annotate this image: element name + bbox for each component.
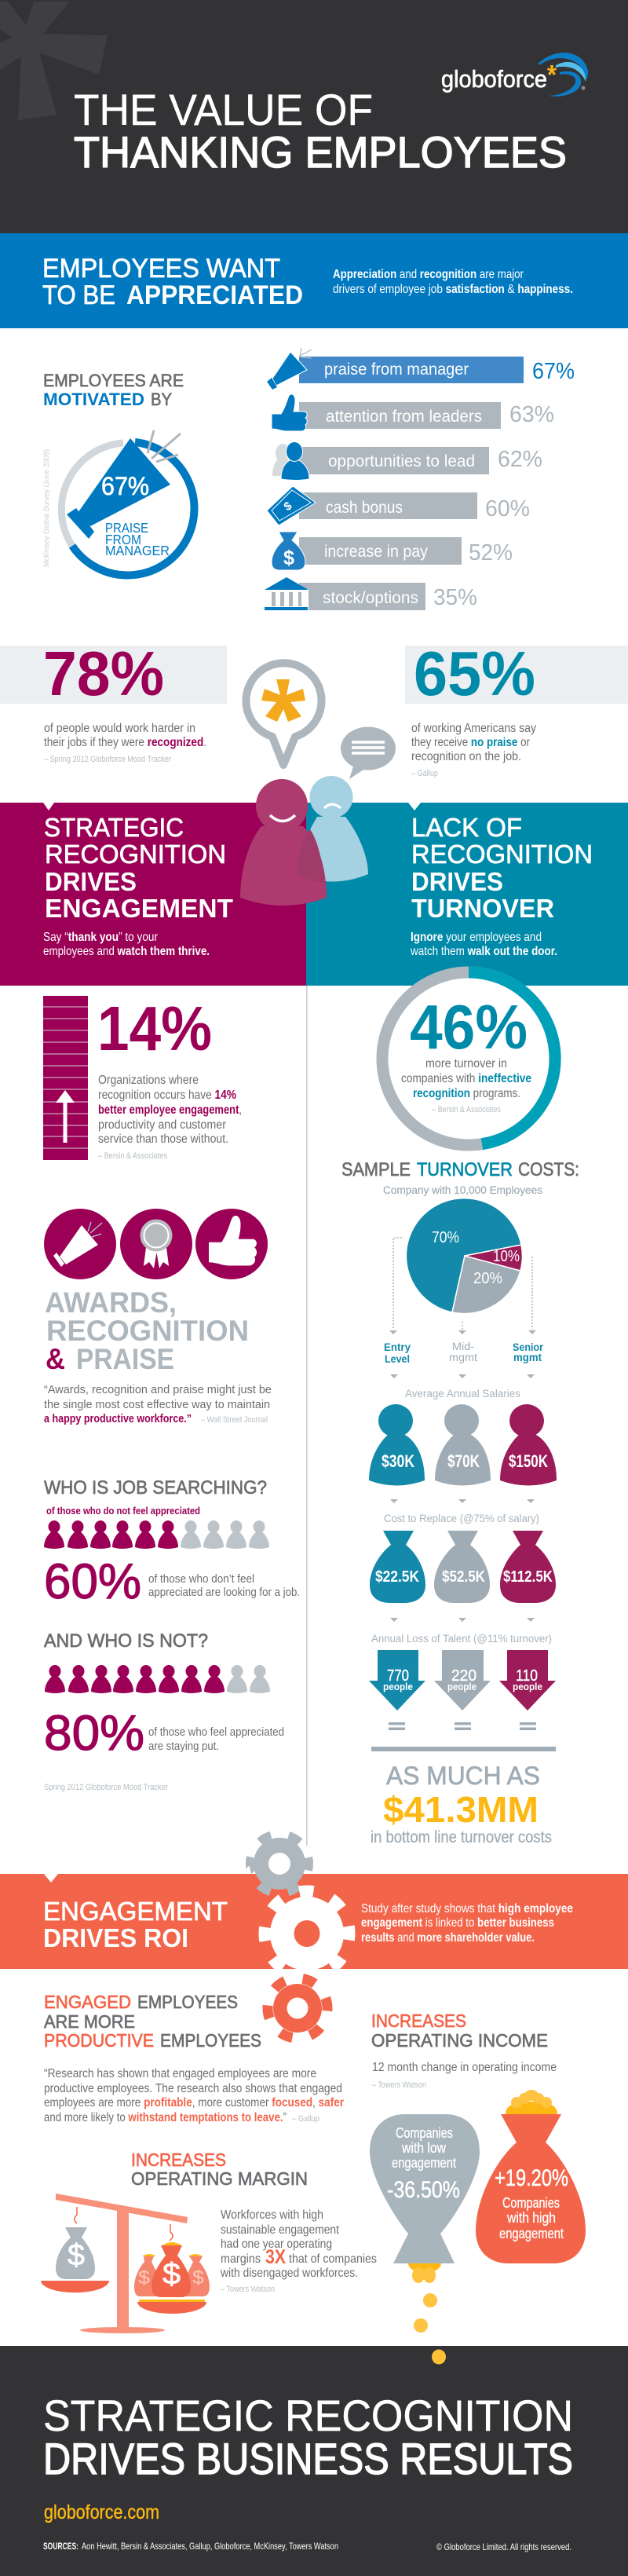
logo: globoforce: globoforce xyxy=(441,65,547,93)
arrow: 770 people: people xyxy=(383,1681,413,1692)
right bags: $ xyxy=(192,2267,204,2289)
subheading: of those who do not feel appreciated xyxy=(46,1505,200,1517)
description: 12 month change in operating income xyxy=(372,2061,557,2074)
panel: increases operating margin xyxy=(41,2150,377,2333)
source: McKinsey Global Survey (June 2009) xyxy=(42,449,50,567)
panel: 65% stat: 65% xyxy=(414,639,535,708)
title: THE VALUE OF xyxy=(74,85,373,134)
center divider xyxy=(306,986,308,1846)
bar: opportunities to lead: 62% xyxy=(498,447,542,472)
subtitle: Company with 10,000 Employees xyxy=(383,1184,542,1196)
icon: happy person xyxy=(240,779,327,906)
panel: 46% more turnover: 46% xyxy=(410,992,528,1062)
arrows: annual loss xyxy=(369,1650,556,1711)
source: – Towers Watson xyxy=(372,2080,426,2090)
panel: sample turnover costs xyxy=(341,1159,579,1846)
heading: RECOGNITION xyxy=(45,840,226,869)
panel: awards recognition and praise xyxy=(44,1209,272,1425)
title xyxy=(74,85,567,177)
icon: megaphone badge xyxy=(44,1209,116,1279)
description xyxy=(410,931,557,958)
description: – Spring 2012 Globoforce Mood Tracker xyxy=(44,755,171,764)
bar: attention from leaders xyxy=(299,402,554,429)
pie chart: 10% xyxy=(493,1248,520,1265)
person: senior management: $150K xyxy=(509,1451,548,1471)
description: watch them walk out the door. xyxy=(410,945,557,958)
description: employees and watch them thrive. xyxy=(43,945,210,958)
heading: EMPLOYEES xyxy=(160,2030,261,2051)
header panel xyxy=(0,0,628,233)
arrow: 110 people: 110 xyxy=(516,1667,538,1685)
bag: low engagement: Companies xyxy=(396,2125,453,2141)
description xyxy=(148,1572,300,1599)
description: of those who don’t feel xyxy=(148,1572,254,1586)
left bag: $ xyxy=(68,2239,85,2272)
heading: EMPLOYEES WANT xyxy=(42,254,280,284)
heading: EMPLOYEES ARE xyxy=(43,371,184,390)
icon: thumbs up xyxy=(272,394,307,431)
heading xyxy=(411,813,593,923)
bar chart xyxy=(265,348,575,611)
description: results and more shareholder value. xyxy=(361,1931,535,1945)
bar: stock/options: 35% xyxy=(433,585,477,610)
quote xyxy=(44,1383,272,1425)
bar: increase in pay: increase in pay xyxy=(324,543,428,561)
heading: OPERATING MARGIN xyxy=(131,2168,308,2189)
pie chart xyxy=(406,1198,522,1314)
arrowheads row 2 xyxy=(390,1374,535,1378)
bag: high engagement: engagement xyxy=(499,2226,564,2241)
bag: high engagement: +19.20% xyxy=(495,2165,568,2191)
bag: low engagement: with low xyxy=(401,2140,447,2156)
heading: COSTS: xyxy=(518,1159,579,1180)
panel: 65% stat xyxy=(405,639,628,778)
description: Say “thank you” to your xyxy=(43,931,159,944)
heading: AND WHO IS NOT? xyxy=(44,1630,208,1652)
heading xyxy=(44,1992,261,2051)
description: recognition occurs have 14% xyxy=(98,1089,236,1102)
heading: OPERATING INCOME xyxy=(371,2030,548,2051)
bar: praise from manager xyxy=(299,357,575,384)
description: sustainable engagement xyxy=(221,2223,339,2237)
description: Workforces with high xyxy=(221,2208,323,2222)
description: – Towers Watson xyxy=(221,2285,275,2294)
description: Appreciation and recognition are major xyxy=(333,268,524,281)
heading xyxy=(371,2011,548,2051)
description: with disengaged workforces. xyxy=(220,2267,358,2280)
logo: globoforce xyxy=(441,53,588,97)
bar: praise from manager: praise from manager xyxy=(324,360,469,379)
heading: TURNOVER xyxy=(417,1159,513,1180)
heading: TURNOVER xyxy=(411,894,554,923)
description: productivity and customer xyxy=(98,1118,226,1132)
heading: RECOGNITION xyxy=(411,840,593,869)
heading: WHO IS JOB SEARCHING? xyxy=(44,1477,267,1498)
description xyxy=(401,1057,531,1114)
stat: 60%: 60% xyxy=(44,1554,141,1609)
closing heading xyxy=(43,2391,573,2483)
description: – Bersin & Associates xyxy=(98,1151,167,1161)
quote: and more likely to withstand temptations to leave.” xyxy=(44,2111,287,2124)
description xyxy=(148,1725,284,1753)
heading: & xyxy=(46,1343,65,1375)
heading: MOTIVATED xyxy=(43,390,144,409)
total bar xyxy=(371,1747,556,1751)
callout: total cost: $41.3MM xyxy=(383,1789,539,1830)
description xyxy=(333,268,573,296)
pictogram: 8 of 10 xyxy=(45,1665,270,1693)
heading: INCREASES xyxy=(131,2150,226,2170)
arrowheads row 3 xyxy=(390,1499,535,1503)
level labels: Senior xyxy=(513,1341,543,1353)
bag: low engagement: engagement xyxy=(392,2155,456,2171)
heading: TO BE xyxy=(42,280,115,310)
icon: money bag xyxy=(272,532,305,570)
arrowheads row 4 xyxy=(390,1618,535,1622)
ring chart 67%: FROM xyxy=(105,532,141,547)
heading xyxy=(44,813,233,923)
panel: who is job searching xyxy=(44,1477,300,1609)
heading: SAMPLE xyxy=(341,1159,411,1180)
heading: ARE MORE xyxy=(44,2011,135,2032)
heading xyxy=(341,1159,579,1180)
description: of working Americans say xyxy=(411,722,536,735)
bar: cash bonus: 60% xyxy=(485,496,530,521)
heading xyxy=(43,371,184,409)
heading: ENGAGED xyxy=(44,1992,131,2012)
bag: entry level xyxy=(370,1531,425,1603)
heading: STRATEGIC xyxy=(44,813,184,842)
icon: message bubble xyxy=(341,727,396,779)
level labels: Level xyxy=(385,1352,410,1365)
quote xyxy=(44,2067,344,2124)
icon: megaphone xyxy=(267,348,312,390)
center figures: speech bubbles and people xyxy=(240,663,396,906)
description: more turnover in xyxy=(425,1057,507,1070)
ring chart 67%: PRAISE xyxy=(105,520,148,536)
description xyxy=(44,722,206,764)
description xyxy=(411,722,536,778)
bar: attention from leaders: 63% xyxy=(509,402,554,427)
callout: total cost xyxy=(371,1762,552,1846)
description: engagement is linked to better business xyxy=(361,1916,554,1930)
arrow: 770 people: 770 xyxy=(387,1667,409,1685)
dotted connectors xyxy=(393,1238,532,1330)
label: average annual salaries: Average Annual Salaries xyxy=(405,1388,520,1400)
bar: opportunities to lead xyxy=(299,447,542,474)
person: senior management xyxy=(500,1404,557,1486)
quote: productive employees. The research also shows that engaged xyxy=(44,2082,342,2095)
callout: total cost: in bottom line turnover costs xyxy=(371,1828,552,1846)
heading: PRODUCTIVE xyxy=(44,2030,154,2051)
icon: bank xyxy=(265,577,309,611)
description: drivers of employee job satisfaction & happiness. xyxy=(333,283,573,296)
description: they receive no praise or xyxy=(411,736,530,749)
icon: grey gear xyxy=(244,1828,315,1899)
heading xyxy=(42,254,303,310)
ring chart 67% xyxy=(61,430,194,575)
title: THANKING EMPLOYEES xyxy=(74,127,567,177)
description: companies with ineffective xyxy=(401,1072,531,1085)
pictogram: 6 of 10 xyxy=(44,1520,269,1549)
description: better employee engagement, xyxy=(98,1103,242,1117)
panel: lack of recognition drives turnover xyxy=(306,803,628,986)
bag: senior management: $112.5K xyxy=(503,1568,553,1586)
person: mid management: $70K xyxy=(447,1451,480,1471)
panel: strategic recognition drives engagement xyxy=(0,803,306,986)
icon: ribbon badge xyxy=(120,1209,192,1279)
bar: cash bonus xyxy=(299,492,530,521)
description: recognition on the job. xyxy=(411,750,521,763)
panel: 14% better engagement xyxy=(43,993,242,1161)
arrowheads row 1 xyxy=(389,1330,536,1334)
description: that of companies xyxy=(289,2252,377,2266)
arrow: 110 people xyxy=(499,1650,556,1711)
description: Organizations where xyxy=(98,1074,199,1087)
description: of people would work harder in xyxy=(44,722,195,735)
ring chart 67%: 67% xyxy=(101,472,149,500)
level labels: mgmt xyxy=(513,1351,542,1363)
description: 3X xyxy=(265,2246,286,2268)
heading: DRIVES xyxy=(45,867,137,896)
description: recognition programs. xyxy=(413,1087,520,1100)
decorative asterisk xyxy=(0,2,108,120)
panel: who is not searching xyxy=(44,1630,284,1792)
description: – Bersin & Associates xyxy=(432,1105,501,1114)
label: cost to replace: Cost to Replace (@75% of salary) xyxy=(384,1513,539,1524)
heading: INCREASES xyxy=(371,2011,466,2031)
source: Spring 2012 Globoforce Mood Tracker xyxy=(44,1783,168,1792)
description: – Gallup xyxy=(411,769,438,778)
heading: AWARDS, xyxy=(45,1286,177,1319)
arrow: 110 people: people xyxy=(513,1681,542,1692)
bar: increase in pay xyxy=(299,537,513,565)
bag: entry level: $22.5K xyxy=(375,1568,419,1586)
panel: 78% stat xyxy=(0,639,227,764)
description: service than those without. xyxy=(98,1132,228,1146)
arrow: 770 people xyxy=(369,1650,425,1711)
sources: SOURCES: xyxy=(43,2541,78,2552)
quote: employees are more profitable, more customer focused, safer xyxy=(44,2096,344,2109)
quote: – Gallup xyxy=(292,2114,319,2124)
quote: the single most cost effective way to maintain xyxy=(44,1398,270,1411)
bag: mid management: $52.5K xyxy=(442,1568,485,1586)
description: had one year operating xyxy=(221,2238,332,2251)
panel: 46% more turnover xyxy=(382,972,555,1145)
scale illustration xyxy=(41,2194,210,2333)
person: mid management xyxy=(435,1404,491,1486)
stat: 80%: 80% xyxy=(44,1706,144,1761)
ring chart xyxy=(382,972,555,1145)
description: appreciated are looking for a job. xyxy=(148,1586,300,1599)
icon: sad person xyxy=(298,776,368,881)
description xyxy=(98,1074,242,1161)
footer panel xyxy=(0,2346,628,2576)
icon: asterisk speech bubble xyxy=(246,663,322,765)
pie chart: 70% xyxy=(432,1229,459,1246)
heading: ENGAGEMENT xyxy=(43,1897,228,1926)
ring chart 67%: MANAGER xyxy=(105,543,170,558)
heading: BY xyxy=(151,390,172,409)
left bag xyxy=(56,2227,95,2279)
heading xyxy=(45,1286,249,1375)
panel: 14% better engagement: 14% xyxy=(97,993,212,1063)
heading xyxy=(43,1897,228,1952)
bag: mid management xyxy=(434,1531,490,1603)
quote: “Research has shown that engaged employees are more xyxy=(44,2067,316,2080)
panel: 78% stat: 78% xyxy=(43,639,164,708)
coins on high engagement bag xyxy=(506,2090,557,2114)
icon: dollar bill xyxy=(267,486,316,525)
bar: praise from manager: 67% xyxy=(532,359,575,384)
level labels xyxy=(384,1340,543,1365)
heading: ENGAGEMENT xyxy=(45,894,233,923)
callout: total cost: AS MUCH AS xyxy=(386,1762,540,1790)
icon: white gear xyxy=(257,1884,356,1983)
heading: EMPLOYEES xyxy=(137,1992,238,2012)
icon: money bag: $ xyxy=(283,546,295,569)
bag: high engagement: Companies xyxy=(502,2195,560,2211)
panel: employees are motivated by xyxy=(42,348,575,611)
person: entry level xyxy=(369,1404,425,1486)
bag: high engagement xyxy=(476,2114,586,2263)
heading: RECOGNITION xyxy=(46,1315,249,1347)
panel: engagement drives ROI xyxy=(0,1874,628,1969)
description xyxy=(220,2208,377,2294)
heading: DRIVES xyxy=(411,867,503,896)
icon: dollar bill: $ xyxy=(282,499,295,514)
icon: people xyxy=(272,441,309,481)
icon: orange gear xyxy=(263,1974,332,2043)
panel: increases operating income xyxy=(370,2011,586,2333)
icon: thumbs up badge xyxy=(195,1209,268,1279)
heading: APPRECIATED xyxy=(126,280,303,310)
bag: low engagement xyxy=(370,2114,480,2263)
closing heading: STRATEGIC RECOGNITION xyxy=(43,2391,573,2440)
bar: attention from leaders: attention from leaders xyxy=(326,408,482,426)
falling coins xyxy=(408,2263,441,2333)
arrow: 220 people: people xyxy=(447,1681,476,1692)
description: their jobs if they were recognized. xyxy=(44,736,206,749)
level labels: mgmt xyxy=(449,1351,477,1363)
right bags: $ xyxy=(162,2258,181,2291)
description: are staying put. xyxy=(148,1740,219,1753)
bag: senior management xyxy=(500,1531,556,1603)
description: Ignore your employees and xyxy=(411,931,542,944)
copyright: © Globoforce Limited. All rights reserved. xyxy=(436,2541,571,2552)
description xyxy=(43,931,210,958)
arrow: 220 people: 220 xyxy=(451,1667,476,1685)
right bags: $ xyxy=(138,2267,150,2289)
bar: cash bonus: cash bonus xyxy=(326,499,403,517)
quote: a happy productive workforce.” xyxy=(44,1412,192,1425)
bags: cost to replace xyxy=(370,1531,556,1603)
bar: stock/options xyxy=(299,583,477,610)
quote: “Awards, recognition and praise might just be xyxy=(44,1383,272,1396)
bag: high engagement: with high xyxy=(506,2210,556,2226)
bag: low engagement: -36.50% xyxy=(387,2177,460,2203)
panel: employees want to be appreciated xyxy=(0,233,628,328)
heading: LACK OF xyxy=(411,813,522,842)
heading xyxy=(131,2150,308,2189)
chart: rising bar xyxy=(43,996,88,1160)
heading: PRAISE xyxy=(76,1343,174,1375)
people: salaries xyxy=(369,1404,557,1486)
bar: stock/options: stock/options xyxy=(323,589,418,607)
level labels: Mid- xyxy=(452,1340,474,1352)
heading: DRIVES ROI xyxy=(43,1923,188,1952)
description: margins xyxy=(221,2252,261,2266)
arrow: 220 people xyxy=(434,1650,491,1711)
pie chart: 20% xyxy=(473,1270,502,1287)
bar: increase in pay: 52% xyxy=(469,540,513,565)
website: globoforce.com xyxy=(44,2501,159,2523)
description: of those who feel appreciated xyxy=(148,1725,284,1739)
equals signs xyxy=(389,1722,536,1730)
quote: – Wall Street Journal xyxy=(201,1415,268,1425)
bar: opportunities to lead: opportunities to lead xyxy=(328,452,475,470)
label: annual loss of talent: Annual Loss of Talent (@11% turnover) xyxy=(371,1633,552,1645)
description: Study after study shows that high employee xyxy=(361,1902,573,1916)
right bags xyxy=(134,2242,210,2297)
level labels: Entry xyxy=(384,1341,411,1353)
footer panel: Aon Hewitt, Bersin & Associates, Gallup, Globoforce, McKinsey, Towers Watson xyxy=(82,2541,338,2552)
description xyxy=(361,1902,573,1945)
panel: engaged employees xyxy=(44,1992,344,2124)
person: entry level: $30K xyxy=(382,1451,414,1471)
